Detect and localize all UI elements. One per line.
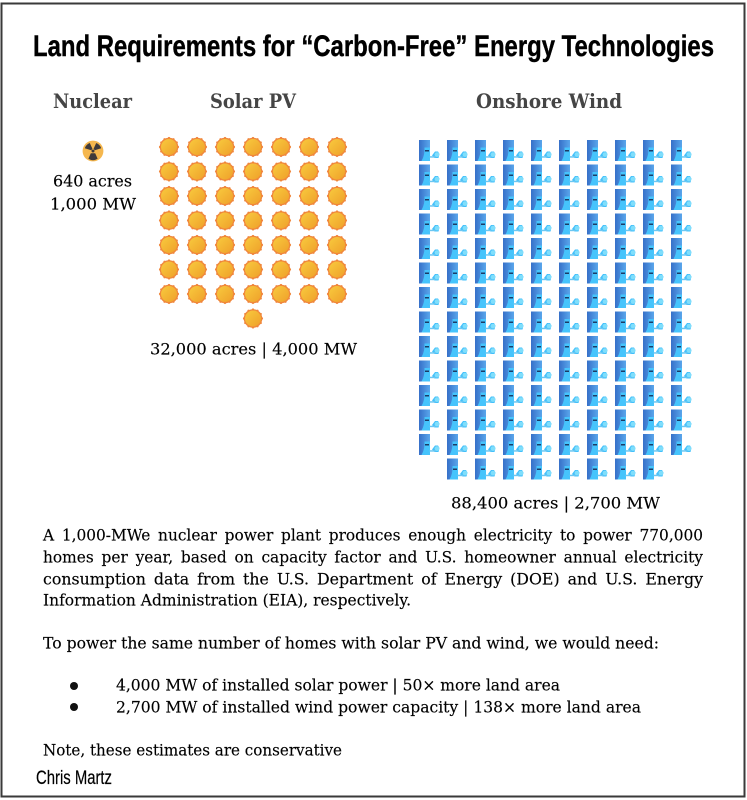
solar PV icon grid [159,137,347,329]
bullet list: 2,700 MW of installed wind power capacity | 138× more land area [116,698,641,716]
wind icon grid [419,140,692,480]
body paragraph: A 1,000-MWe nuclear power plant produces enough electricity to power 770,000 [42,526,703,544]
icon: nuclear symbol [83,141,103,161]
author credit: Chris Martz [36,768,112,789]
body paragraph: Information Administration (EIA), respectively. [43,590,411,610]
body paragraph [42,526,703,610]
heading: solar PV: Solar PV [210,89,296,113]
bullet list: 4,000 MW of installed solar power | 50× more land area [116,676,560,694]
heading: onshore wind: Onshore Wind [476,89,622,113]
nuclear stats: 1,000 MW [50,194,137,214]
heading: nuclear: Nuclear [53,89,132,113]
solar stats: 32,000 acres | 4,000 MW [150,340,358,358]
lead-in sentence: To power the same number of homes with solar PV and wind, we would need: [43,634,659,652]
bullet list [70,676,641,716]
nuclear stats: 640 acres [53,172,132,190]
body paragraph: consumption data from the U.S. Department of Energy (DOE) and U.S. Energy [43,570,703,588]
note: Note, these estimates are conservative [43,740,342,760]
body paragraph: homes per year, based on capacity factor and U.S. homeowner annual electricity [43,548,703,566]
wind stats: 88,400 acres | 2,700 MW [451,494,661,512]
nuclear stats [50,172,137,214]
